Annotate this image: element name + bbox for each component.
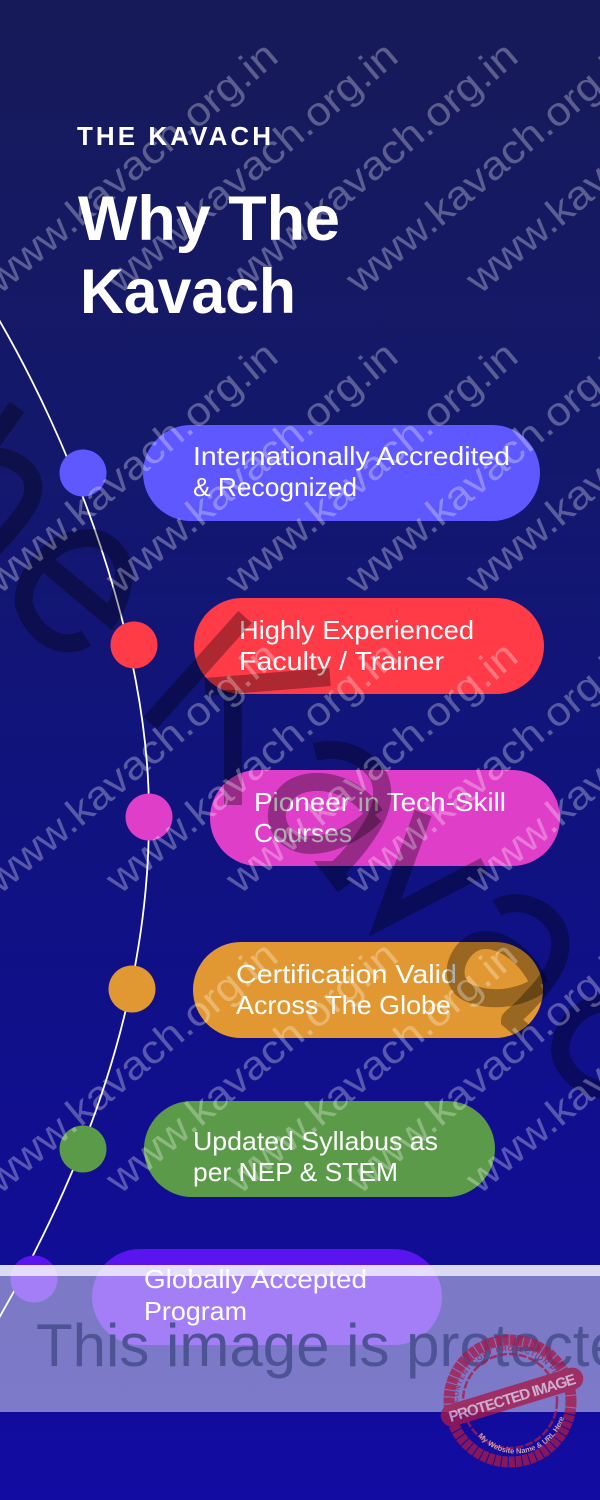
heading: Why The Kavach [78,184,340,327]
watermark: repeated site address: www.kavach.org.in [217,33,526,303]
title block [77,121,340,327]
watermark: repeated site address: www.kavach.org.in [217,633,526,903]
panel: Updated Syllabus: Updated Syllabus as [193,1126,438,1156]
timeline dots [10,450,172,1302]
panel: Certification Valid: Certification Valid [236,959,457,989]
panel: Internationally Accredited: & Recognized [193,472,357,502]
stamp bottom arc text: My Website Name & URL Here [478,1417,564,1454]
panel: Internationally Accredited [143,425,540,521]
watermark: repeated site address: www.kavach.org.in [97,33,406,303]
watermark: repeated site address: www.kavach.org.in [217,333,526,603]
watermark: repeated site address: www.kavach.org.in [217,933,526,1203]
panel: Pioneer in Tech-Skill: Pioneer in Tech-Skill [254,787,506,817]
eyebrow: THE KAVACH: THE KAVACH [77,121,271,151]
watermark: repeated site address: www.kavach.org.in [97,933,406,1203]
timeline curve [0,313,149,1325]
watermark: repeated site address: www.kavach.org.in [97,333,406,603]
heading: Why The Kavach: Kavach [80,257,296,327]
panel: Pioneer in Tech-Skill [210,770,560,866]
stamp top arc text: WP CONTENT COPY PROTECTION PLUGIN [454,1346,556,1402]
panel: Globally Accepted: Program [144,1296,247,1326]
stamp banner: PROTECTED IMAGE [447,1371,578,1426]
panel: Certification Valid: Across The Globe [236,990,451,1020]
panel: Highly Experienced: Faculty / Trainer [239,646,444,676]
panel: Highly Experienced [194,598,544,694]
dark handwritten signature [0,407,600,1090]
panel: Globally Accepted [92,1249,442,1345]
watermark: repeated site address: www.kavach.org.in [97,633,406,903]
panel: Certification Valid [193,942,543,1038]
panel: Updated Syllabus [144,1101,495,1197]
panel: Internationally Accredited: Internationally Accredited [193,441,510,471]
panel: Pioneer in Tech-Skill: Courses [254,818,352,848]
panel: Highly Experienced: Highly Experienced [239,615,474,645]
protection overlay band [0,1265,600,1412]
heading: Why The Kavach: Why The [78,184,340,254]
panel: Globally Accepted: Globally Accepted [144,1264,367,1294]
panel: Updated Syllabus: per NEP & STEM [193,1157,398,1187]
watermark: repeated site address [0,33,600,1203]
